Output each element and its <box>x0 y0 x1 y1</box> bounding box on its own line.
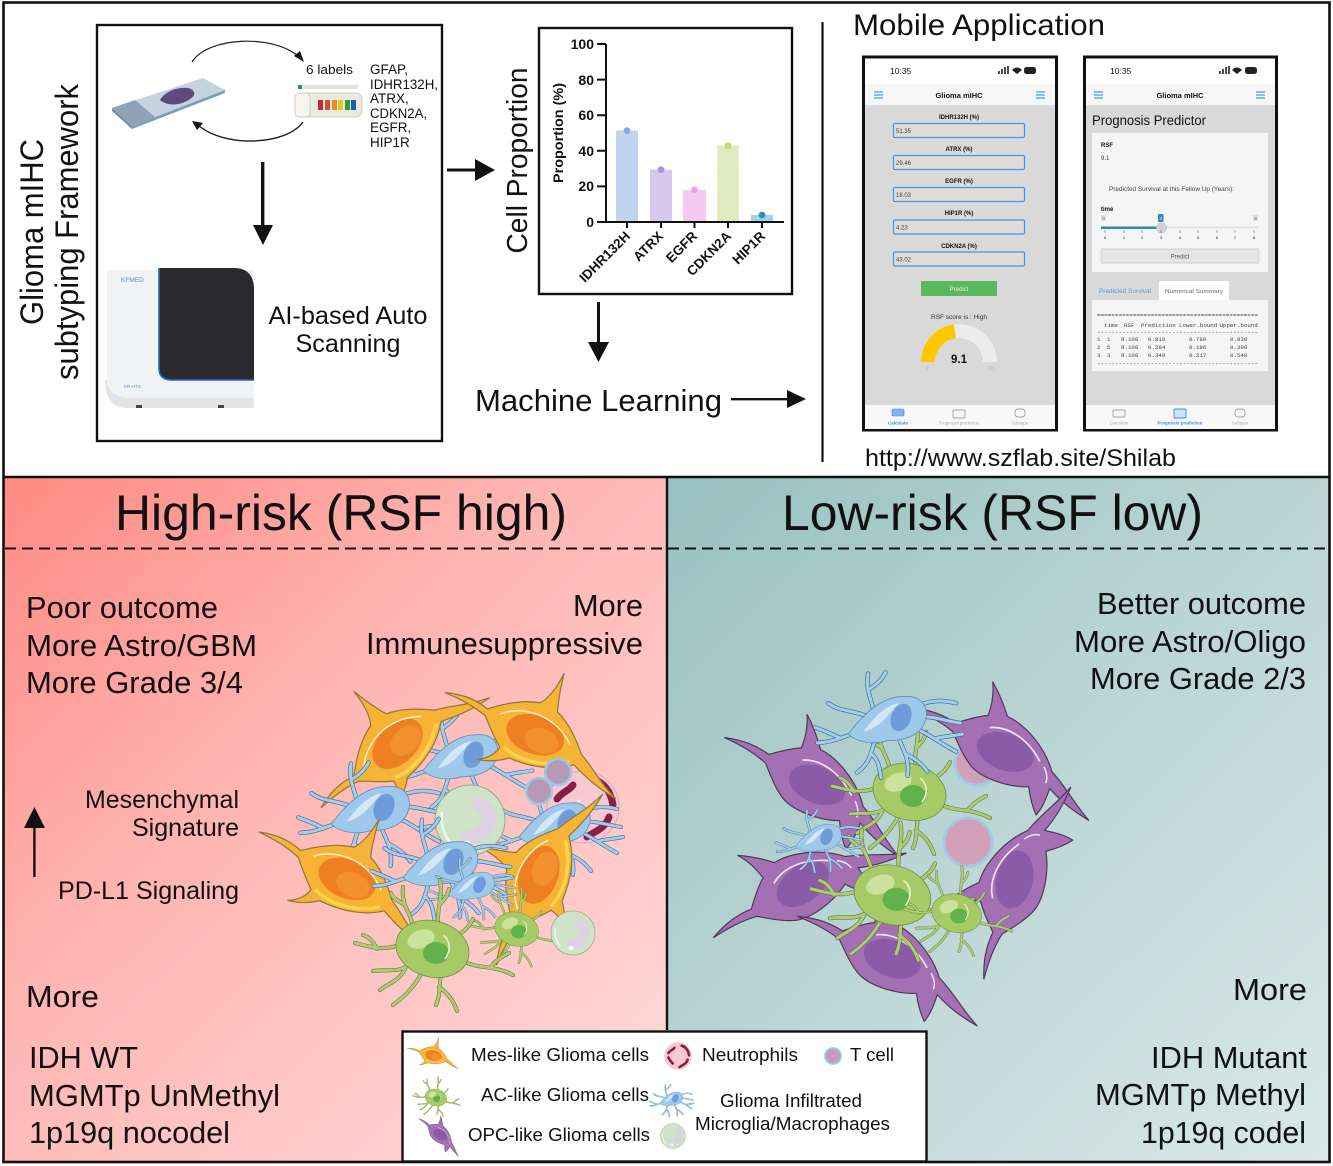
slider: time: 8 <box>1254 216 1257 221</box>
heading: Mobile Application: Mobile Application <box>853 9 1105 42</box>
nav: bottom tabs: Calculate <box>888 420 908 426</box>
form: biomarker inputs: CDKN2A (%) <box>941 244 977 250</box>
text: signature labels: Mesenchymal <box>85 786 239 814</box>
table: numerical summary: 0.390 <box>1230 344 1248 351</box>
table: numerical summary: ============================================= <box>1097 312 1259 319</box>
panel: predictor form <box>1092 133 1268 272</box>
arrow: curved top <box>192 41 304 62</box>
table: numerical summary: time <box>1104 322 1118 329</box>
text: signature labels: PD-L1 Signaling <box>58 877 239 905</box>
arrow: to cell proportion <box>447 159 495 181</box>
table: numerical summary: 0.284 <box>1148 344 1166 351</box>
slider: time <box>1101 214 1259 240</box>
chart: x axis labels <box>576 228 768 285</box>
form: biomarker inputs: 18.03 <box>896 193 912 199</box>
chart: y axis numbers: 20 <box>578 178 594 194</box>
slider: time: 0 <box>1102 216 1105 221</box>
chart: RSF gauge: 20 <box>988 366 994 372</box>
chart: RSF gauge: 0 <box>926 366 929 372</box>
table: numerical summary: RSF <box>1124 322 1135 329</box>
slider: time: 5 <box>1197 235 1200 240</box>
chart: x axis labels: HIP1R <box>729 228 768 267</box>
slider: time: 0 <box>1104 235 1107 240</box>
nav: bottom tabs: Subtype <box>1232 420 1249 426</box>
arrow: chart to machine learning <box>588 302 609 362</box>
icon: antibody tube <box>295 85 362 117</box>
arrow: machine learning to app <box>731 390 806 408</box>
nav: bottom tabs: Prognosis prediction <box>939 420 980 426</box>
panel: staining and scanning <box>97 25 442 441</box>
tabs: result tabs: Predicted Survival <box>1099 289 1151 295</box>
slider: time: 6 <box>1216 235 1219 240</box>
form: biomarker inputs: 43.02 <box>896 258 912 264</box>
form: biomarker inputs: ATRX (%) <box>946 147 972 153</box>
chart: x axis labels: IDHR132H <box>576 229 633 285</box>
heading: Cell Proportion: Cell Proportion <box>502 68 534 254</box>
text: signature labels <box>58 786 239 905</box>
arrow: curved bottom <box>192 121 303 141</box>
table: numerical summary: 0.780 <box>1189 336 1207 343</box>
icon: T cell <box>825 1048 841 1064</box>
text: high-risk molecular list: 1p19q nocodel <box>29 1115 230 1150</box>
text: AI-based Auto Scanning: Scanning <box>296 330 400 358</box>
text: high-risk outcome list <box>26 590 257 700</box>
tabs: result tabs <box>1099 281 1229 300</box>
panel: predictor form: RSF <box>1101 143 1113 149</box>
table: numerical summary: Lower.bound <box>1179 322 1217 329</box>
text: low-risk outcome list: Better outcome <box>1097 586 1306 621</box>
heading: Prognosis Predictor: Prognosis Predictor <box>1092 113 1206 128</box>
text: low-risk outcome list: More Astro/Oligo <box>1074 624 1306 659</box>
form: biomarker inputs: 29.46 <box>896 161 912 167</box>
text: immunosuppressive note: Immunesuppressive <box>366 626 643 661</box>
chart: y axis numbers: 60 <box>578 107 594 123</box>
icon: AC-like cell <box>413 1077 460 1116</box>
table: numerical summary: 9.100 <box>1121 336 1139 343</box>
icon: neutrophil <box>665 1043 691 1069</box>
chart: data points <box>624 127 765 218</box>
phone: calculate screen: Glioma mIHC <box>935 91 983 100</box>
chart: x axis labels: CDKN2A <box>684 228 734 279</box>
text: marker list <box>370 62 438 150</box>
table: numerical summary: 3 <box>1097 352 1101 359</box>
title: framework heading: Glioma mIHC <box>14 139 50 325</box>
button: Predict: Predict <box>950 287 969 293</box>
table: numerical summary: --------------------------------------------- <box>1097 360 1258 367</box>
panel: bar chart <box>539 28 792 294</box>
title: framework heading: subtyping Framework <box>49 83 85 380</box>
table: numerical summary: --------------------------------------------- <box>1097 329 1258 336</box>
text: immunosuppressive note <box>366 588 643 661</box>
table: numerical summary <box>1092 300 1268 371</box>
legend <box>400 1024 926 1166</box>
text: AI-based Auto Scanning: AI-based Auto <box>268 302 428 330</box>
legend label: AC-like: AC-like Glioma cells <box>481 1084 649 1105</box>
legend label: Neutrophils: Neutrophils <box>702 1044 798 1065</box>
chart: y axis numbers: 40 <box>578 143 594 159</box>
legend label: T cell: T cell <box>850 1044 894 1065</box>
button: Predict <box>921 281 997 296</box>
slider: time: 3 <box>1160 235 1163 240</box>
table: numerical summary: 0.186 <box>1189 344 1207 351</box>
text: marker list: CDKN2A, <box>370 106 427 121</box>
panel: low-risk background <box>667 477 1329 1161</box>
slider: time: 7 <box>1234 235 1237 240</box>
form: biomarker inputs: 51.35 <box>896 129 912 135</box>
chart: RSF gauge <box>921 314 997 372</box>
legend label: Mes-like: Mes-like Glioma cells <box>471 1044 649 1065</box>
chart: y axis title: Proportion (%) <box>550 83 566 183</box>
text: marker list: IDHR132H, <box>370 77 438 92</box>
arrow: slide to scanner <box>253 162 273 245</box>
chart: x axis labels: ATRX <box>630 229 666 264</box>
nav: bottom tabs <box>865 405 1055 429</box>
text: high-risk molecular list: MGMTp UnMethyl <box>29 1078 280 1113</box>
nav: bottom tabs <box>1086 405 1275 429</box>
table: numerical summary: 9.100 <box>1121 352 1139 359</box>
text: high-risk molecular list: IDH WT <box>29 1040 138 1075</box>
legend label: OPC-like: OPC-like Glioma cells <box>468 1124 650 1145</box>
chart: axes <box>597 44 784 228</box>
text: high-risk outcome list: Poor outcome <box>26 590 218 625</box>
nav: bottom tabs: Prognosis prediction <box>1157 420 1203 426</box>
table: numerical summary: 1 <box>1107 336 1111 343</box>
legend label: microglia and macrophages: Glioma Infiltrated <box>720 1090 862 1111</box>
panel: high-risk background <box>4 477 667 1161</box>
slider: time: 2 <box>1141 235 1144 240</box>
text: low-risk molecular list: IDH Mutant <box>1151 1040 1307 1075</box>
icon: OPC-like cell <box>407 1099 476 1166</box>
text: website URL: http://www.szflab.site/Shilab <box>865 445 1176 472</box>
chart: bars <box>616 131 773 221</box>
button: Predict <box>1101 249 1259 263</box>
panel: predictor form: 9.1 <box>1101 156 1110 162</box>
icon: scanner <box>105 268 254 408</box>
icon: macrophage <box>660 1123 686 1149</box>
phone: calculate screen <box>864 57 1056 430</box>
text: 6 labels: 6 labels <box>306 62 354 77</box>
text: low-risk outcome list <box>1074 586 1306 696</box>
text: high-risk molecular list: More <box>26 979 99 1014</box>
phone: prognosis screen <box>1084 57 1276 430</box>
icon: Mes-like cell <box>400 1024 468 1080</box>
panel: predictor form: Predicted Survival at this Fellow Up (Years): <box>1109 187 1234 193</box>
chart: RSF gauge: RSF score is : High <box>931 314 987 321</box>
icon: tissue slide <box>112 78 225 129</box>
table: numerical summary: 3 <box>1107 352 1111 359</box>
slider: time: 8 <box>1253 235 1256 240</box>
text: high-risk molecular list <box>26 979 280 1150</box>
arrow: upregulation <box>24 807 45 877</box>
slider: time: 1 <box>1123 235 1126 240</box>
chart: y axis numbers <box>571 36 594 230</box>
chart: RSF gauge: 9.1 <box>951 354 968 366</box>
slider: time: 3 <box>1159 216 1162 221</box>
legend label: microglia and macrophages <box>695 1090 890 1134</box>
phone: calculate screen: 10:35 <box>890 66 912 76</box>
table: numerical summary: 9.100 <box>1121 344 1139 351</box>
text: low-risk molecular list: 1p19q codel <box>1141 1115 1306 1150</box>
text: immunosuppressive note: More <box>573 588 643 623</box>
chart: y axis numbers: 80 <box>578 72 594 88</box>
form: biomarker inputs: 4.23 <box>896 226 908 232</box>
tabs: result tabs: Numerical Summary <box>1165 289 1223 295</box>
text: AI-based Auto Scanning <box>268 302 428 358</box>
text: marker list: HIP1R <box>370 135 410 150</box>
icon: status bar <box>1220 66 1257 74</box>
text: signature labels: Signature <box>132 814 239 842</box>
panel: predictor form: time <box>1101 207 1114 213</box>
table: numerical summary: 2 <box>1097 344 1101 351</box>
table: numerical summary: 0.540 <box>1230 352 1248 359</box>
chart: y axis numbers: 0 <box>586 214 594 230</box>
text: low-risk molecular list: More <box>1233 972 1307 1007</box>
text: marker list: ATRX, <box>370 91 409 106</box>
phone: prognosis screen: 10:35 <box>1110 66 1132 76</box>
text: marker list: EGFR, <box>370 120 411 135</box>
chart: y axis numbers: 100 <box>571 36 594 52</box>
text: low-risk molecular list <box>1095 972 1307 1150</box>
table: numerical summary: 1 <box>1097 336 1101 343</box>
illustration: high-risk cell cluster <box>223 607 667 1011</box>
nav: bottom tabs: Subtype <box>1012 420 1029 426</box>
icon: scanner: KFMED <box>121 277 144 284</box>
title: framework heading <box>14 83 85 380</box>
icon: microglia <box>650 1085 694 1116</box>
table: numerical summary: 0.930 <box>1230 336 1248 343</box>
button: Predict: Predict <box>1171 254 1190 260</box>
text: Machine Learning: Machine Learning <box>475 383 722 418</box>
table: numerical summary: 0.340 <box>1148 352 1166 359</box>
form: biomarker inputs <box>894 115 1024 266</box>
table: numerical summary: 5 <box>1107 344 1111 351</box>
form: biomarker inputs: EGFR (%) <box>945 179 973 185</box>
illustration: low-risk cell cluster <box>666 625 1140 1072</box>
heading: Low-risk: Low-risk (RSF low) <box>782 485 1203 541</box>
table: numerical summary: 0.217 <box>1189 352 1207 359</box>
form: biomarker inputs: HIP1R (%) <box>945 211 973 217</box>
text: high-risk outcome list: More Grade 3/4 <box>26 665 243 700</box>
phone: prognosis screen: Glioma mIHC <box>1156 91 1204 100</box>
table: numerical summary: 0.810 <box>1148 336 1166 343</box>
slider: time: 4 <box>1179 235 1182 240</box>
icon: scanner: KR-HTS <box>124 384 141 389</box>
form: biomarker inputs: IDHR132H (%) <box>939 115 979 121</box>
text: marker list: GFAP, <box>370 62 408 77</box>
heading: High-risk: High-risk (RSF high) <box>115 485 567 541</box>
legend label: microglia and macrophages: Microglia/Macrophages <box>695 1113 890 1134</box>
text: low-risk outcome list: More Grade 2/3 <box>1090 661 1306 696</box>
text: low-risk molecular list: MGMTp Methyl <box>1095 1077 1306 1112</box>
text: high-risk outcome list: More Astro/GBM <box>26 628 257 663</box>
table: numerical summary: Prediction <box>1141 322 1176 329</box>
nav: bottom tabs: Calculate <box>1110 420 1129 426</box>
icon: status bar <box>999 66 1036 74</box>
table: numerical summary: Upper.bound <box>1220 322 1258 329</box>
chart: x axis labels: EGFR <box>663 228 700 266</box>
